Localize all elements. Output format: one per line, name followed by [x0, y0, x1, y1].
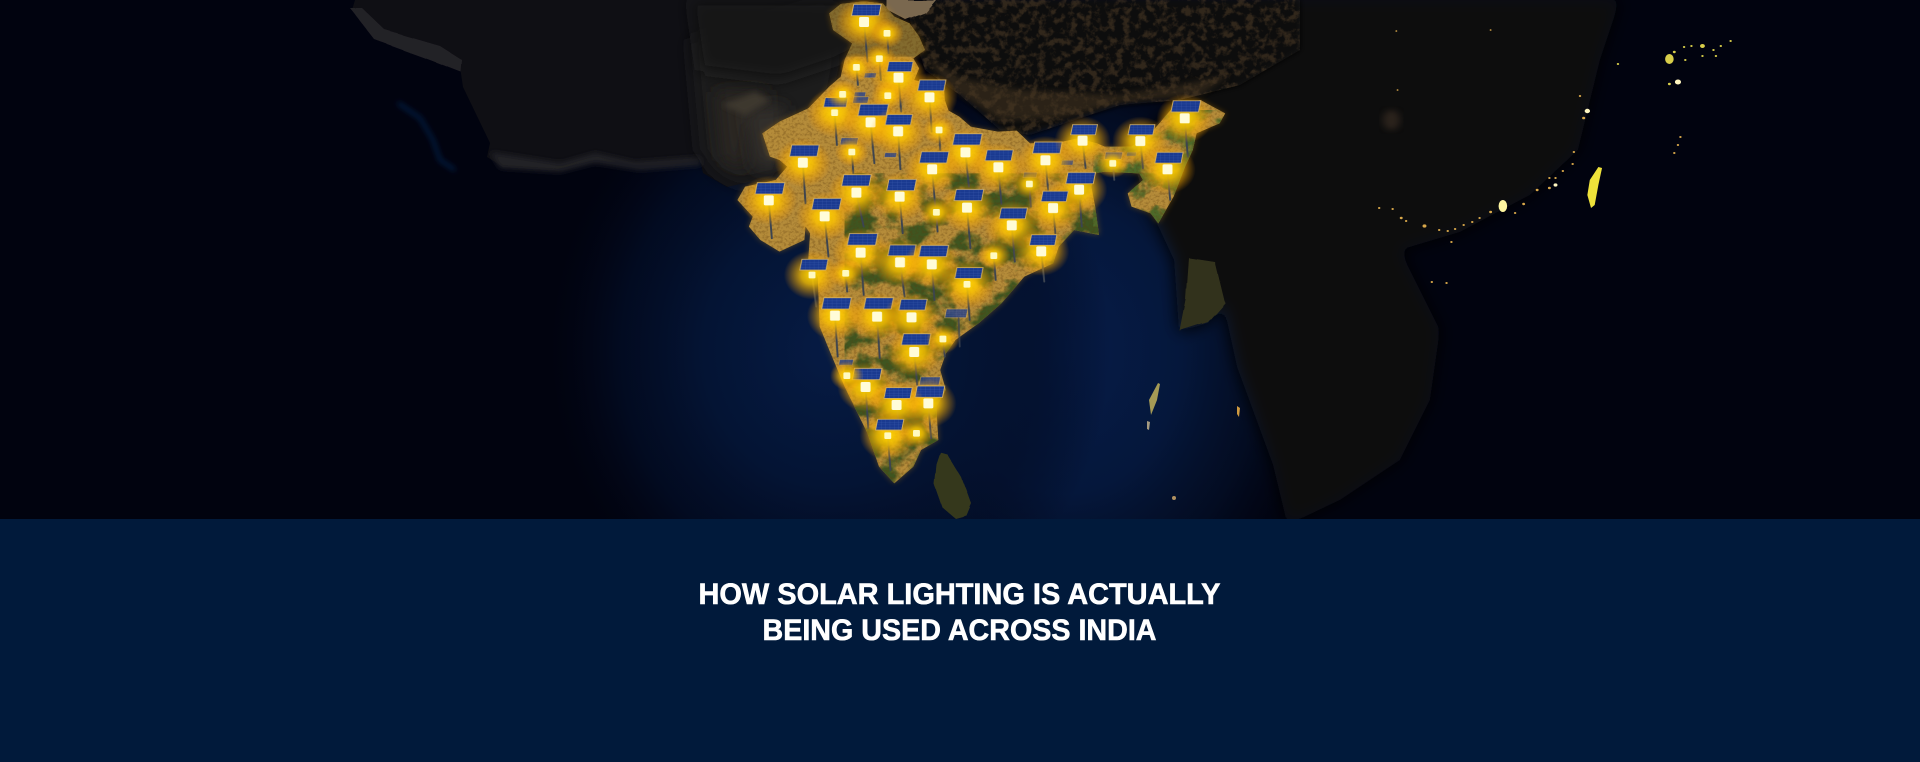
solar lamp [1025, 183, 1081, 233]
solar lamp [806, 88, 863, 145]
small lamp [840, 53, 873, 85]
solar lamp [970, 143, 1027, 204]
land: Southeast Asia and China [1130, 0, 1620, 519]
Hong Kong lights [1499, 200, 1507, 212]
solar lamp [1112, 116, 1169, 168]
land: Arabian peninsula and Iran [350, 0, 900, 187]
solar lamp [1017, 136, 1074, 190]
Taiwan [1587, 167, 1602, 208]
solar lamp [903, 240, 960, 300]
map glow halo [737, 1, 1225, 483]
land: Himalaya and Tibet [900, 0, 1310, 140]
small lamp [863, 44, 896, 80]
solar lamp [796, 192, 853, 257]
solar lamp [1156, 94, 1213, 157]
small lamp [1013, 169, 1046, 207]
Sri Lanka [935, 453, 971, 518]
small lamp [900, 419, 933, 448]
Japan lights [1617, 40, 1732, 85]
small lamp [870, 19, 904, 53]
solar lamp [828, 168, 885, 227]
solar lamp [784, 250, 840, 307]
small lamp [871, 81, 905, 110]
solar lamp [837, 362, 894, 428]
land: Kashmir upper region [887, 0, 936, 20]
navy caption band [0, 519, 1920, 762]
solar lamp [807, 291, 863, 357]
small lamp [829, 259, 863, 292]
solar lamp [849, 292, 905, 358]
solar lamp [775, 138, 831, 203]
dim background panels [839, 73, 1137, 385]
India landmass [735, 0, 1228, 484]
solar lamp [1139, 145, 1196, 200]
solar lamp [740, 176, 797, 238]
China interior faint glow [1383, 110, 1400, 130]
ocean: Bay of Bengal [805, 30, 1325, 670]
small lamp [977, 241, 1011, 280]
solar lamp [900, 379, 957, 438]
Ryukyu and coast lights [1378, 29, 1682, 284]
solar lamp [842, 98, 899, 163]
solar lamp [1051, 165, 1107, 227]
title: BEING USED ACROSS INDIA [762, 614, 1156, 647]
solar lamp [904, 145, 960, 207]
solar lamp [886, 327, 942, 385]
small lamp [826, 80, 859, 109]
East Asia city lights [1378, 29, 1732, 284]
satellite night map background [0, 0, 1920, 519]
solar lamp [939, 183, 995, 248]
solar lamp [832, 228, 889, 295]
solar lamp [868, 380, 925, 430]
Andaman and Nicobar islands [1147, 383, 1240, 500]
solar lamp [1013, 227, 1070, 282]
solar lamp [870, 53, 927, 112]
solar lamp [859, 411, 916, 470]
solar lamp [872, 238, 928, 297]
small lamp [1096, 149, 1130, 180]
small lamp [920, 198, 953, 232]
ocean: Arabian Sea [550, 50, 1110, 650]
land: Pakistan [690, 0, 840, 185]
solar lamp [836, 0, 892, 62]
small lamp [922, 115, 956, 150]
faint Arabian Sea current [398, 103, 455, 170]
title: HOW SOLAR LIGHTING IS ACTUALLY [698, 578, 1220, 611]
solar lamp [939, 260, 995, 320]
India terrain [738, 2, 1226, 484]
solar lamp [883, 293, 940, 342]
solar lamp [870, 107, 926, 169]
solar lamp [937, 128, 994, 187]
solar lamp [1054, 116, 1111, 168]
solar lamp [983, 201, 1040, 262]
solar lamp [901, 73, 958, 132]
solar street lamps across India [740, 0, 1213, 470]
small lamp [926, 324, 960, 357]
small lamp [835, 137, 869, 173]
solar lamp [871, 172, 928, 233]
small lamp [830, 361, 864, 390]
title [698, 578, 1220, 647]
land: Afghanistan north west [690, 0, 900, 80]
